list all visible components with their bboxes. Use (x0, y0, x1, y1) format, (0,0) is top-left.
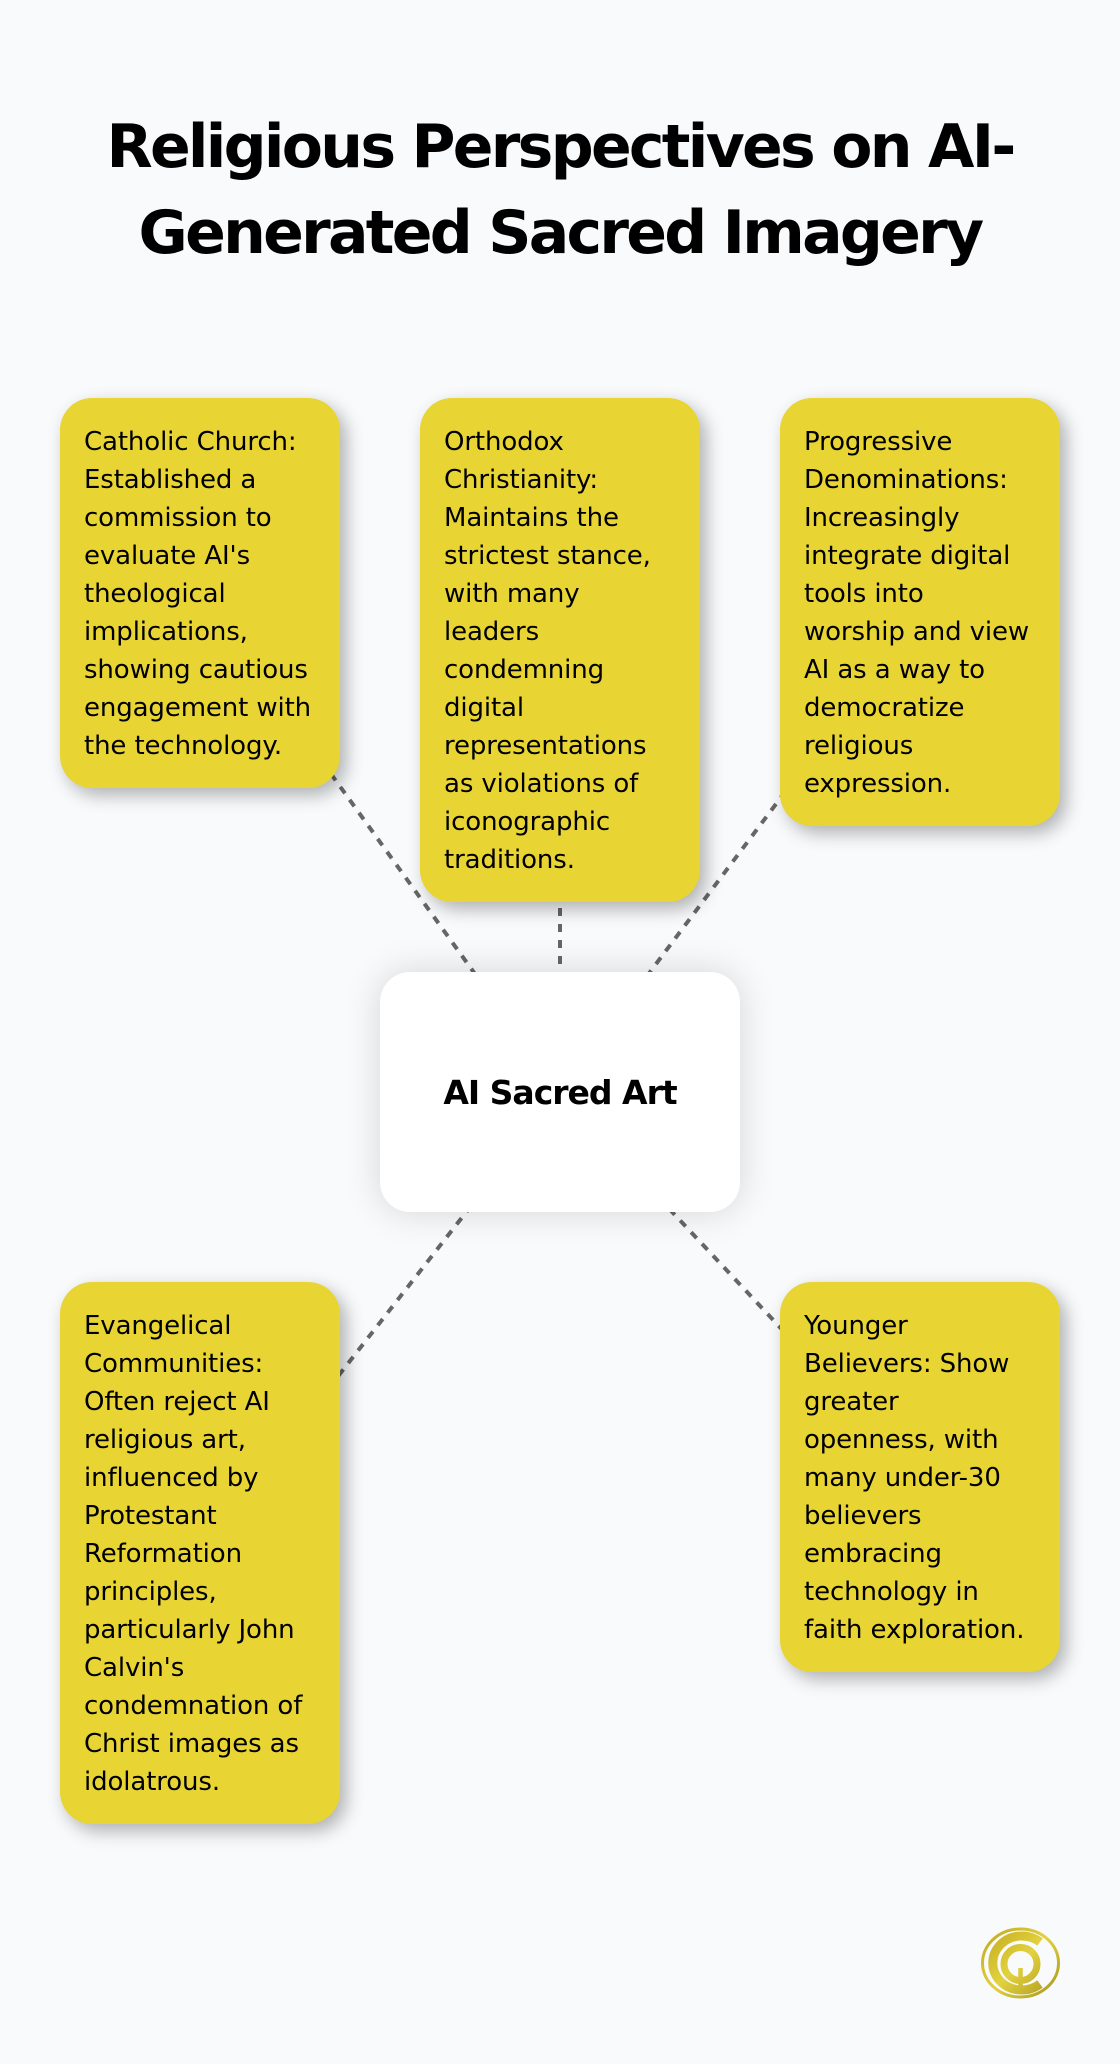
panel: Progressive Denominations: AI as a way to (804, 655, 985, 685)
center node: AI Sacred Art (380, 972, 740, 1212)
panel: Younger Believers: Believers: Show (804, 1349, 1009, 1379)
panel: Progressive Denominations: religious (804, 731, 913, 761)
panel: Progressive Denominations: tools into (804, 579, 924, 609)
panel: Evangelical Communities: idolatrous. (84, 1767, 220, 1797)
panel: Younger Believers: faith exploration. (804, 1615, 1024, 1645)
panel: Evangelical Communities: Evangelical (84, 1311, 231, 1341)
panel: Orthodox Christianity: leaders (444, 617, 539, 647)
panel: Younger Believers (780, 1282, 1060, 1672)
panel: Catholic Church (60, 398, 340, 788)
panel: Progressive Denominations: worship and view (804, 617, 1029, 647)
panel: Evangelical Communities (60, 1282, 340, 1824)
panel: Evangelical Communities: condemnation of (84, 1691, 302, 1721)
icon: gold CQ logo (981, 1928, 1060, 1998)
panel: Catholic Church: theological (84, 579, 226, 609)
panel: Progressive Denominations: Increasingly (804, 503, 959, 533)
title (106, 112, 1014, 268)
panel: Progressive Denominations: Progressive (804, 427, 952, 457)
panel: Catholic Church: commission to (84, 503, 272, 533)
panel: Younger Believers: many under-30 (804, 1463, 1001, 1493)
panel: Younger Believers: embracing (804, 1539, 942, 1569)
panel: Catholic Church: implications, (84, 617, 248, 647)
panel: Evangelical Communities: Communities: (84, 1349, 263, 1379)
panel: Evangelical Communities: influenced by (84, 1463, 258, 1493)
panel: Orthodox Christianity: iconographic (444, 807, 610, 837)
panel: Orthodox Christianity: Christianity: (444, 465, 598, 495)
title: Generated Sacred Imagery (139, 198, 981, 268)
panel: Orthodox Christianity: representations (444, 731, 646, 761)
panel: Orthodox Christianity (420, 398, 700, 902)
panel: Catholic Church: Established a (84, 465, 256, 495)
panel: Evangelical Communities: Christ images as (84, 1729, 299, 1759)
panel: Progressive Denominations: integrate digital (804, 541, 1010, 571)
panel: Orthodox Christianity: with many (444, 579, 579, 609)
panel: Younger Believers: greater (804, 1387, 899, 1417)
panel: Orthodox Christianity: condemning (444, 655, 604, 685)
panel: Younger Believers: technology in (804, 1577, 979, 1607)
panel: Progressive Denominations (780, 398, 1060, 826)
panel: Younger Believers: openness, with (804, 1425, 998, 1455)
panel: Orthodox Christianity: Maintains the (444, 503, 619, 533)
panel: Catholic Church: evaluate AI's (84, 541, 250, 571)
panel: Orthodox Christianity: strictest stance, (444, 541, 651, 571)
panel: Evangelical Communities: Protestant (84, 1501, 217, 1531)
panel: Younger Believers: believers (804, 1501, 921, 1531)
panel: Evangelical Communities: Often reject AI (84, 1387, 270, 1417)
panel: Catholic Church: Catholic Church: (84, 427, 297, 457)
panel: Evangelical Communities: particularly John (84, 1615, 295, 1645)
panel: Evangelical Communities: religious art, (84, 1425, 246, 1455)
panel: Younger Believers: Younger (804, 1311, 908, 1341)
panel: Evangelical Communities: Calvin's (84, 1653, 184, 1683)
panel: Evangelical Communities: principles, (84, 1577, 217, 1607)
panel: Orthodox Christianity: as violations of (444, 769, 638, 799)
panel: Progressive Denominations: democratize (804, 693, 964, 723)
panel: Orthodox Christianity: Orthodox (444, 427, 564, 457)
panel: Catholic Church: showing cautious (84, 655, 308, 685)
panel: Orthodox Christianity: digital (444, 693, 524, 723)
panel: Progressive Denominations: expression. (804, 769, 951, 799)
panel: Catholic Church: engagement with (84, 693, 311, 723)
title: Religious Perspectives on AI- (106, 112, 1014, 182)
panel: Progressive Denominations: Denominations: (804, 465, 1008, 495)
panel: Catholic Church: the technology. (84, 731, 282, 761)
panel: Evangelical Communities: Reformation (84, 1539, 242, 1569)
center node: AI Sacred Art: AI Sacred Art (443, 1073, 677, 1112)
panel: Orthodox Christianity: traditions. (444, 845, 575, 875)
